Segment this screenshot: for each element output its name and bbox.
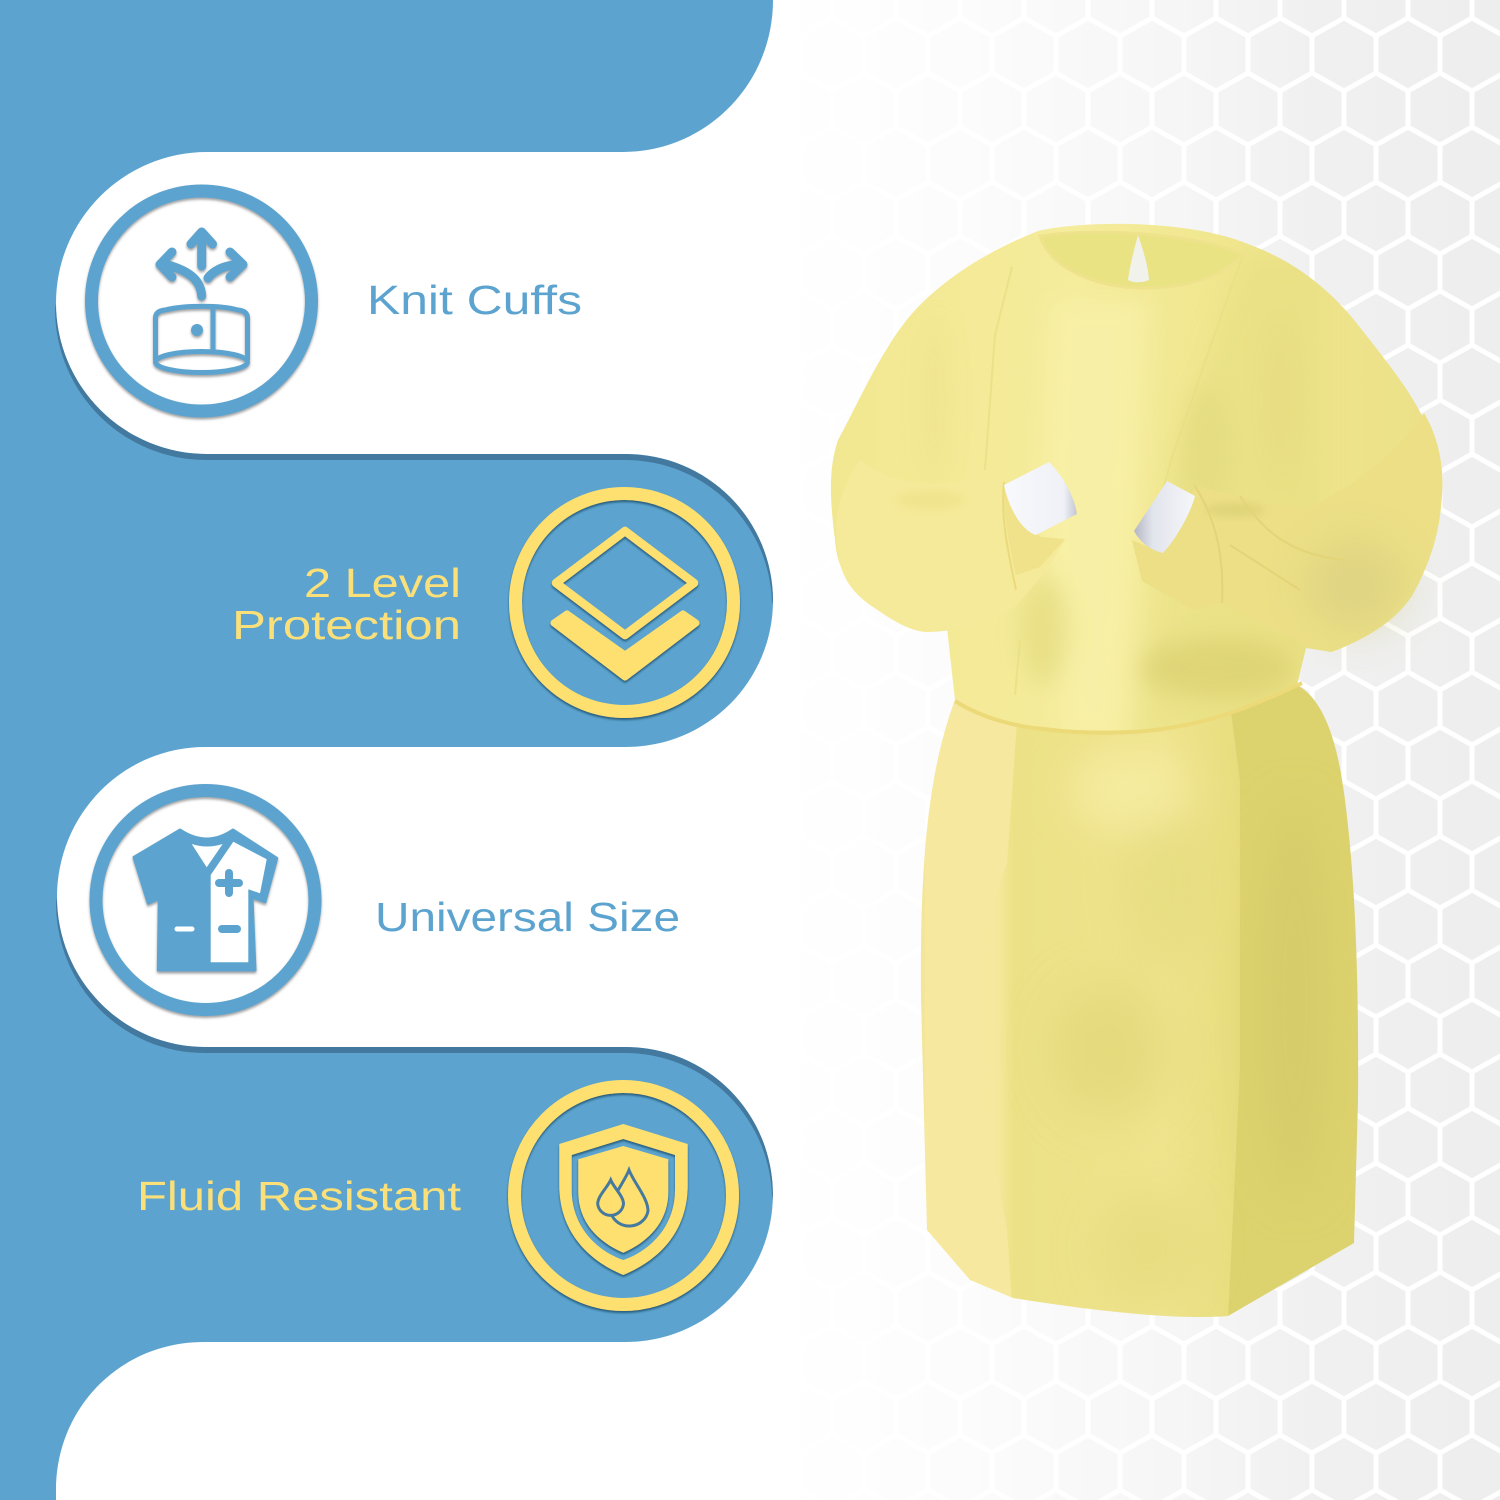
gown skirt	[915, 680, 1365, 1330]
hexagon background pattern	[780, 0, 1500, 1500]
feature: Universal Size	[96, 790, 680, 1010]
yellow isolation gown	[820, 215, 1460, 1330]
right white knit cuff	[1134, 481, 1195, 553]
label: 2 Level Protection: Protection	[232, 602, 461, 648]
label: Universal Size: Universal Size	[375, 894, 680, 940]
left white knit cuff	[1004, 462, 1077, 535]
right sleeve forearm	[1132, 413, 1442, 652]
blue curved side panel	[0, 0, 773, 1500]
feature: 2 Level Protection	[232, 494, 734, 712]
left sleeve forearm	[836, 460, 1065, 632]
feature: Fluid Resistant	[137, 1086, 732, 1304]
label: 2 Level Protection: 2 Level	[304, 560, 461, 606]
gown silhouette and shading	[820, 215, 1460, 1330]
label: Fluid Resistant: Fluid Resistant	[137, 1173, 462, 1219]
icon: two layers	[516, 494, 734, 712]
label: 2 Level Protection	[232, 560, 461, 648]
icon: shield with water drops	[514, 1086, 732, 1304]
feature: Knit Cuffs	[92, 191, 582, 411]
label: Knit Cuffs: Knit Cuffs	[367, 277, 582, 323]
gown upper body shading	[1018, 264, 1311, 730]
icon: half-filled medical scrub shirt	[96, 790, 315, 1010]
waist tie belt	[955, 683, 1302, 733]
icon: knit cuff with arrows	[92, 191, 312, 411]
neck opening and back slit	[1040, 232, 1243, 288]
